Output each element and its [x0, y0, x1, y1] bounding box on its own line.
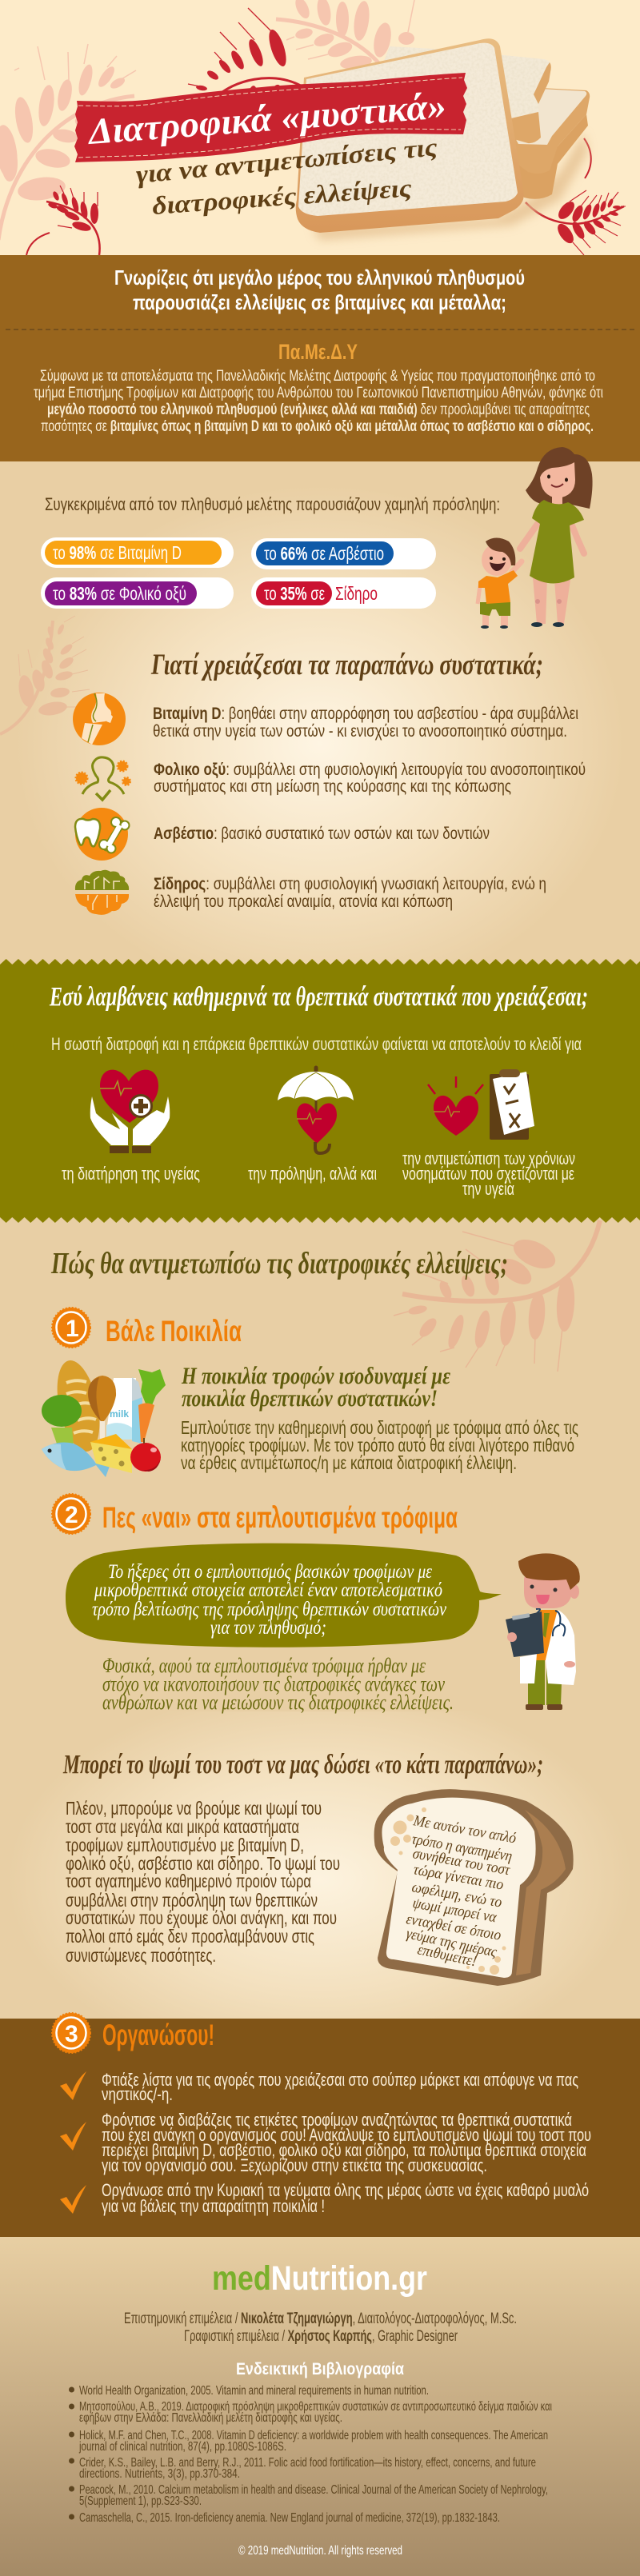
bubble text: τρόπο βελτίωσης της πρόσληψης θρεπτικών συστατικών — [92, 1599, 447, 1620]
pill: 98% vitamin D: το 98% σε Βιταμίνη D — [53, 542, 182, 563]
pill: 35% iron — [251, 577, 436, 609]
wheat: pale section right — [394, 1220, 600, 1372]
bread note text — [405, 1812, 518, 1970]
bread note text: ενταχθεί σε όποιο — [405, 1911, 502, 1944]
pill: 66% calcium: το 66% σε Ασβέστιο — [264, 543, 384, 564]
panel: organise band — [0, 2013, 640, 2237]
wheat: pale section left — [0, 616, 90, 734]
bread note text: τώρα γίνεται πιο — [412, 1861, 505, 1894]
section background: nutrients — [0, 461, 640, 965]
check 3 — [60, 2185, 86, 2214]
icon: person with sparks — [76, 757, 130, 800]
study paragraph: μεγάλο ποσοστό του ελληνικού πληθυσμού (ενήλικες αλλά και παιδιά) δεν προσλαμβάνει τις απαραίτητες — [47, 401, 590, 418]
step 2 heading: Πες «ναι» στα εμπλουτισμένα τρόφιμα — [102, 1501, 458, 1534]
credits: Γραφιστική επιμέλεια / Χρήστος Καρπής, Graphic Designer — [184, 2328, 458, 2345]
badge: step 1: 1 — [66, 1316, 79, 1342]
text: folic acid — [154, 761, 586, 796]
middle slice — [512, 88, 590, 174]
back slice crust — [504, 62, 551, 143]
paragraph: toast bread: συνιστώμενες ποσότητες. — [66, 1945, 216, 1966]
handwritten note: στόχο να ικανοποιήσουν τις διατροφικές ανάγκες των — [102, 1672, 445, 1695]
intro question: Γνωρίζεις ότι μεγάλο μέρος του ελληνικού πληθυσμού — [114, 266, 525, 290]
badge: step 3: 3 — [65, 2021, 78, 2047]
check 2 — [60, 2122, 86, 2151]
badge: step 1 — [52, 1308, 90, 1348]
icon: brain — [75, 870, 129, 915]
bread note text: συνήθεια του τοστ — [411, 1845, 512, 1879]
labels under icons: την υγεία — [462, 1179, 514, 1199]
title ribbon — [74, 73, 467, 162]
text: calcium: Ασβέστιο: βασικό συστατικό των οστών και των δοντιών — [154, 825, 490, 843]
paragraph: toast bread: πολλοι από εμάς δεν προσλαμβάνουν στις — [66, 1926, 314, 1947]
lower slice — [512, 114, 588, 199]
paragraph: toast bread: συμβάλλει στην πρόσληψη των θρεπτικών — [66, 1890, 318, 1911]
hero background — [0, 0, 640, 255]
step 1 subheading: ποικιλία θρεπτικών συστατικών! — [182, 1385, 438, 1412]
illustration: bread slice note — [374, 1789, 574, 1986]
panel: brown intro band — [0, 255, 640, 461]
pill: 98% vitamin D — [41, 537, 234, 568]
pill: 83% folic acid: το 83% σε Φολικό οξύ — [53, 583, 186, 604]
paragraph: toast bread: τοστ στα μεγάλα και μικρά καταστήματα — [66, 1816, 299, 1837]
wheat: large left pink — [0, 44, 136, 240]
subtitle: για να αντιμετωπίσεις τις — [134, 132, 438, 189]
bread shadow — [312, 132, 588, 240]
labels under icons: την αντιμετώπιση των χρόνιων — [402, 1148, 575, 1168]
badge: step 2 — [52, 1494, 90, 1534]
bread note text: τρόπο η αγαπημένη — [410, 1831, 514, 1865]
paragraph: toast bread: Πλέον, μπορούμε να βρούμε και ψωμί του — [66, 1798, 322, 1819]
credits: Επιστημονική επιμέλεια / Νικολέτα Τζημαγιώργη, Διαιτολόγος-Διατροφολόγος, M.Sc. — [124, 2310, 517, 2327]
speech bubble — [66, 1544, 502, 1647]
illustration: food group: milk — [110, 1408, 129, 1420]
front slice crumb — [298, 43, 518, 216]
wheat: red right — [526, 138, 626, 255]
bubble text: για τον πληθυσμό; — [210, 1617, 326, 1639]
bibliography list: 5(Supplement 1), pp.S23-S30. — [79, 2494, 202, 2508]
panel: green daily nutrients band — [0, 959, 640, 1223]
panel: footer — [0, 2237, 640, 2576]
credits — [124, 2310, 517, 2345]
badge: step 2: 2 — [65, 1502, 78, 1528]
bread note text: Με αυτόν τον απλό — [411, 1812, 518, 1847]
step 1 subheading — [181, 1363, 451, 1412]
check 1 — [60, 2071, 86, 2100]
lead-in text: Συγκεκριμένα από τον πληθυσμό μελέτης παρουσιάζουν χαμηλή πρόσληψη: — [45, 494, 500, 514]
step 1 heading: Βάλε Ποικιλία — [106, 1315, 242, 1348]
bread note text: γεύμα της ημέρας — [405, 1925, 498, 1961]
pill: 35% iron: το 35% σε — [264, 583, 325, 604]
paragraph: toast bread: τροφίμων εμπλουτισμένο με βιταμίνη D, — [66, 1835, 304, 1855]
illustration: food group — [42, 1356, 166, 1477]
icon: umbrella over heart — [278, 1068, 354, 1153]
section background: how to — [0, 1217, 640, 2019]
bubble text — [92, 1561, 447, 1639]
bubble text: Το ήξερες ότι ο εμπλουτισμός βασικών τροφίμων με — [108, 1561, 432, 1583]
back slice — [382, 46, 550, 142]
text: vitamin D — [153, 705, 578, 741]
labels under icons: νοσημάτων που σχετίζονται με — [402, 1164, 574, 1184]
bread note text: ψωμί μπορεί να — [411, 1895, 498, 1926]
bubble text: μικροθρεπτικά στοιχεία αποτελεί έναν αποτελεσματικό — [94, 1580, 442, 1601]
text: iron: έλλειψή του προκαλεί αναιμία, ατονία και κόπωση — [154, 893, 453, 911]
wheat: small red lower left — [26, 186, 100, 255]
handwritten note: ανθρώπων και να μειώσουν τις διατροφικές ελλείψεις. — [102, 1691, 454, 1714]
study paragraph — [34, 368, 603, 435]
logo: medNutrition.gr — [212, 2259, 427, 2298]
copyright: © 2019 medNutrition. All rights reserved — [238, 2544, 402, 2558]
woman illustration — [520, 447, 593, 627]
bread note text: επιθυμείτε! — [416, 1941, 478, 1970]
tip 3: για να βάλεις την απαραίτητη ποικιλία ! — [102, 2196, 325, 2216]
paragraph: toast bread: τοστ αγαπημένο καθημερινό προιόν τώρα — [66, 1871, 311, 1891]
labels under icons — [62, 1148, 575, 1199]
tip 3 — [102, 2180, 589, 2216]
doctor illustration — [506, 1553, 580, 1710]
heading: Pa.Me.D.Y: Πα.Με.Δ.Υ — [278, 340, 358, 364]
step 3 heading: Οργανώσου! — [102, 2019, 214, 2051]
text: folic acid: συστήματος και στη μείωση της κούρασης και της κόπωσης — [154, 777, 511, 796]
text: iron: Σίδηρος: συμβάλλει στη φυσιολογική γνωσιακή λειτουργία, ενώ η — [154, 875, 546, 893]
title: Διατροφικά «μυστικά» — [86, 85, 448, 152]
intro question: παρουσιάζει ελλείψεις σε βιταμίνες και μέταλλα; — [133, 290, 506, 314]
icon: knee joint — [73, 693, 126, 745]
step 1 body: να έρθεις αντιμέτωπος/η με κάποια διατροφική έλλειψη. — [181, 1452, 517, 1473]
bread note text: ωφέλιμη, ενώ το — [410, 1879, 503, 1911]
handwritten note: Φυσικά, αφού τα εμπλουτισμένα τρόφιμα ήρθαν με — [102, 1654, 426, 1677]
tip 2 — [102, 2110, 591, 2175]
bibliography list: World Health Organization, 2005. Vitamin and mineral requirements in human nutrition. — [79, 2384, 429, 2398]
text: iron — [154, 875, 546, 911]
subtitle: διατροφικές ελλείψεις — [151, 173, 413, 220]
boy illustration — [478, 537, 522, 629]
front slice crust — [296, 38, 524, 233]
intro question — [114, 266, 525, 314]
step 1 subheading: Η ποικιλία τροφών ισοδυναμεί με — [181, 1363, 451, 1389]
icon: hands holding heart — [90, 1070, 170, 1153]
tip 1: νηστικός/-η. — [102, 2084, 173, 2104]
bibliography heading: Ενδεικτική Βιβλιογραφία — [236, 2360, 404, 2378]
paragraph: toast bread: φολικό οξύ, ασβέστιο και σίδηρο. Το ψωμί του — [66, 1853, 340, 1874]
labels under icons: τη διατήρηση της υγείας — [62, 1164, 200, 1184]
middle slice crumb — [512, 89, 586, 145]
pill: 35% iron: Σίδηρο — [335, 583, 378, 604]
bibliography list: εφήβων στην Ελλάδα: Πανελλαδική μελέτη διατροφής και υγείας. — [79, 2411, 342, 2425]
badge: step 3 — [52, 2013, 90, 2053]
wheat: top red — [182, 8, 317, 120]
paragraph: toast bread — [66, 1798, 340, 1966]
pill: 66% calcium — [251, 538, 436, 569]
paragraph: toast bread: συστατικών που έχουμε όλοι ανάγκη, και που — [66, 1907, 337, 1928]
step 1 body — [181, 1417, 578, 1473]
bibliography list: directions. Nutrients, 3(3), pp.370-384. — [79, 2467, 240, 2481]
wheat: top pink behind bread — [276, 0, 414, 71]
bibliography list: journal of clinical nutrition, 87(4), pp.1080S-1086S. — [78, 2440, 286, 2454]
handwritten note — [102, 1654, 454, 1714]
tip 2: για τον οργανισμό σου. Ξεχωρίζουν στην ετικέτα της συσκευασίας. — [102, 2155, 487, 2175]
tip 1 — [102, 2070, 578, 2104]
pill: 83% folic acid — [41, 577, 234, 609]
icon: tooth and bone — [75, 808, 130, 861]
subtitle — [134, 132, 438, 220]
icon: heart and clipboard — [428, 1069, 534, 1140]
bibliography list — [69, 2384, 552, 2525]
labels under icons: την πρόληψη, αλλά και — [248, 1164, 377, 1184]
bread slices — [296, 38, 590, 240]
